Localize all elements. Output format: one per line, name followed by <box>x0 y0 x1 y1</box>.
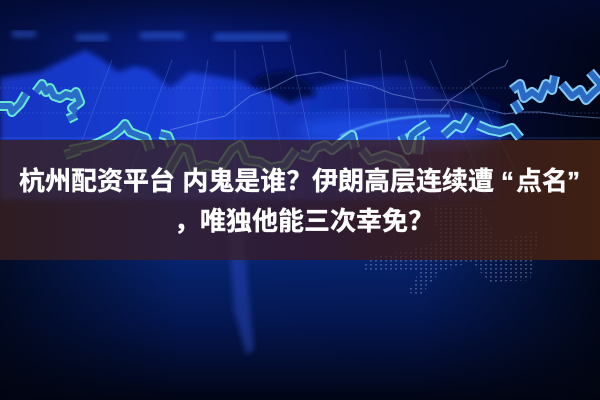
lower area <box>0 260 600 400</box>
blue mountain area <box>0 50 500 200</box>
title: 点名 <box>516 166 568 196</box>
blurred top labels <box>12 31 288 41</box>
grid lines <box>0 45 600 200</box>
title: ，唯独他能三次幸免？ <box>174 206 434 236</box>
dotted world map <box>362 205 540 296</box>
candles: sky blue right <box>512 72 600 112</box>
lower glow <box>295 112 505 148</box>
candles: cyan center-right <box>300 115 520 168</box>
title: ” <box>567 166 580 196</box>
dark gap on mountain right <box>250 70 316 104</box>
title: 伊朗高层连续遭 <box>312 166 494 196</box>
title: “ <box>501 166 514 196</box>
title: 杭州配资平台 内鬼是谁？ <box>19 166 312 196</box>
title <box>19 166 580 236</box>
translucent title band <box>0 140 600 260</box>
candles: teal left <box>0 84 296 180</box>
thin trend lines <box>170 60 600 130</box>
light beam <box>226 200 254 354</box>
